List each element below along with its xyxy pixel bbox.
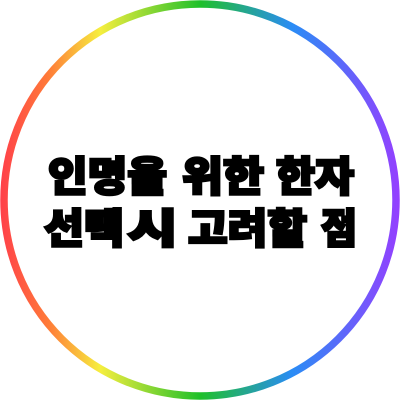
title line 1: 위한 (182, 154, 264, 200)
title line 2: 점 (321, 206, 357, 252)
title (44, 154, 357, 252)
title line 2: 선택 (44, 206, 124, 252)
title line 2: 고려할 (188, 206, 307, 252)
title line 1: 인명을 (48, 154, 167, 200)
title line 1: 한자 (276, 154, 354, 200)
title line 2 (44, 206, 357, 252)
title line 2: 시 (128, 206, 178, 252)
title line 1 (48, 154, 354, 200)
